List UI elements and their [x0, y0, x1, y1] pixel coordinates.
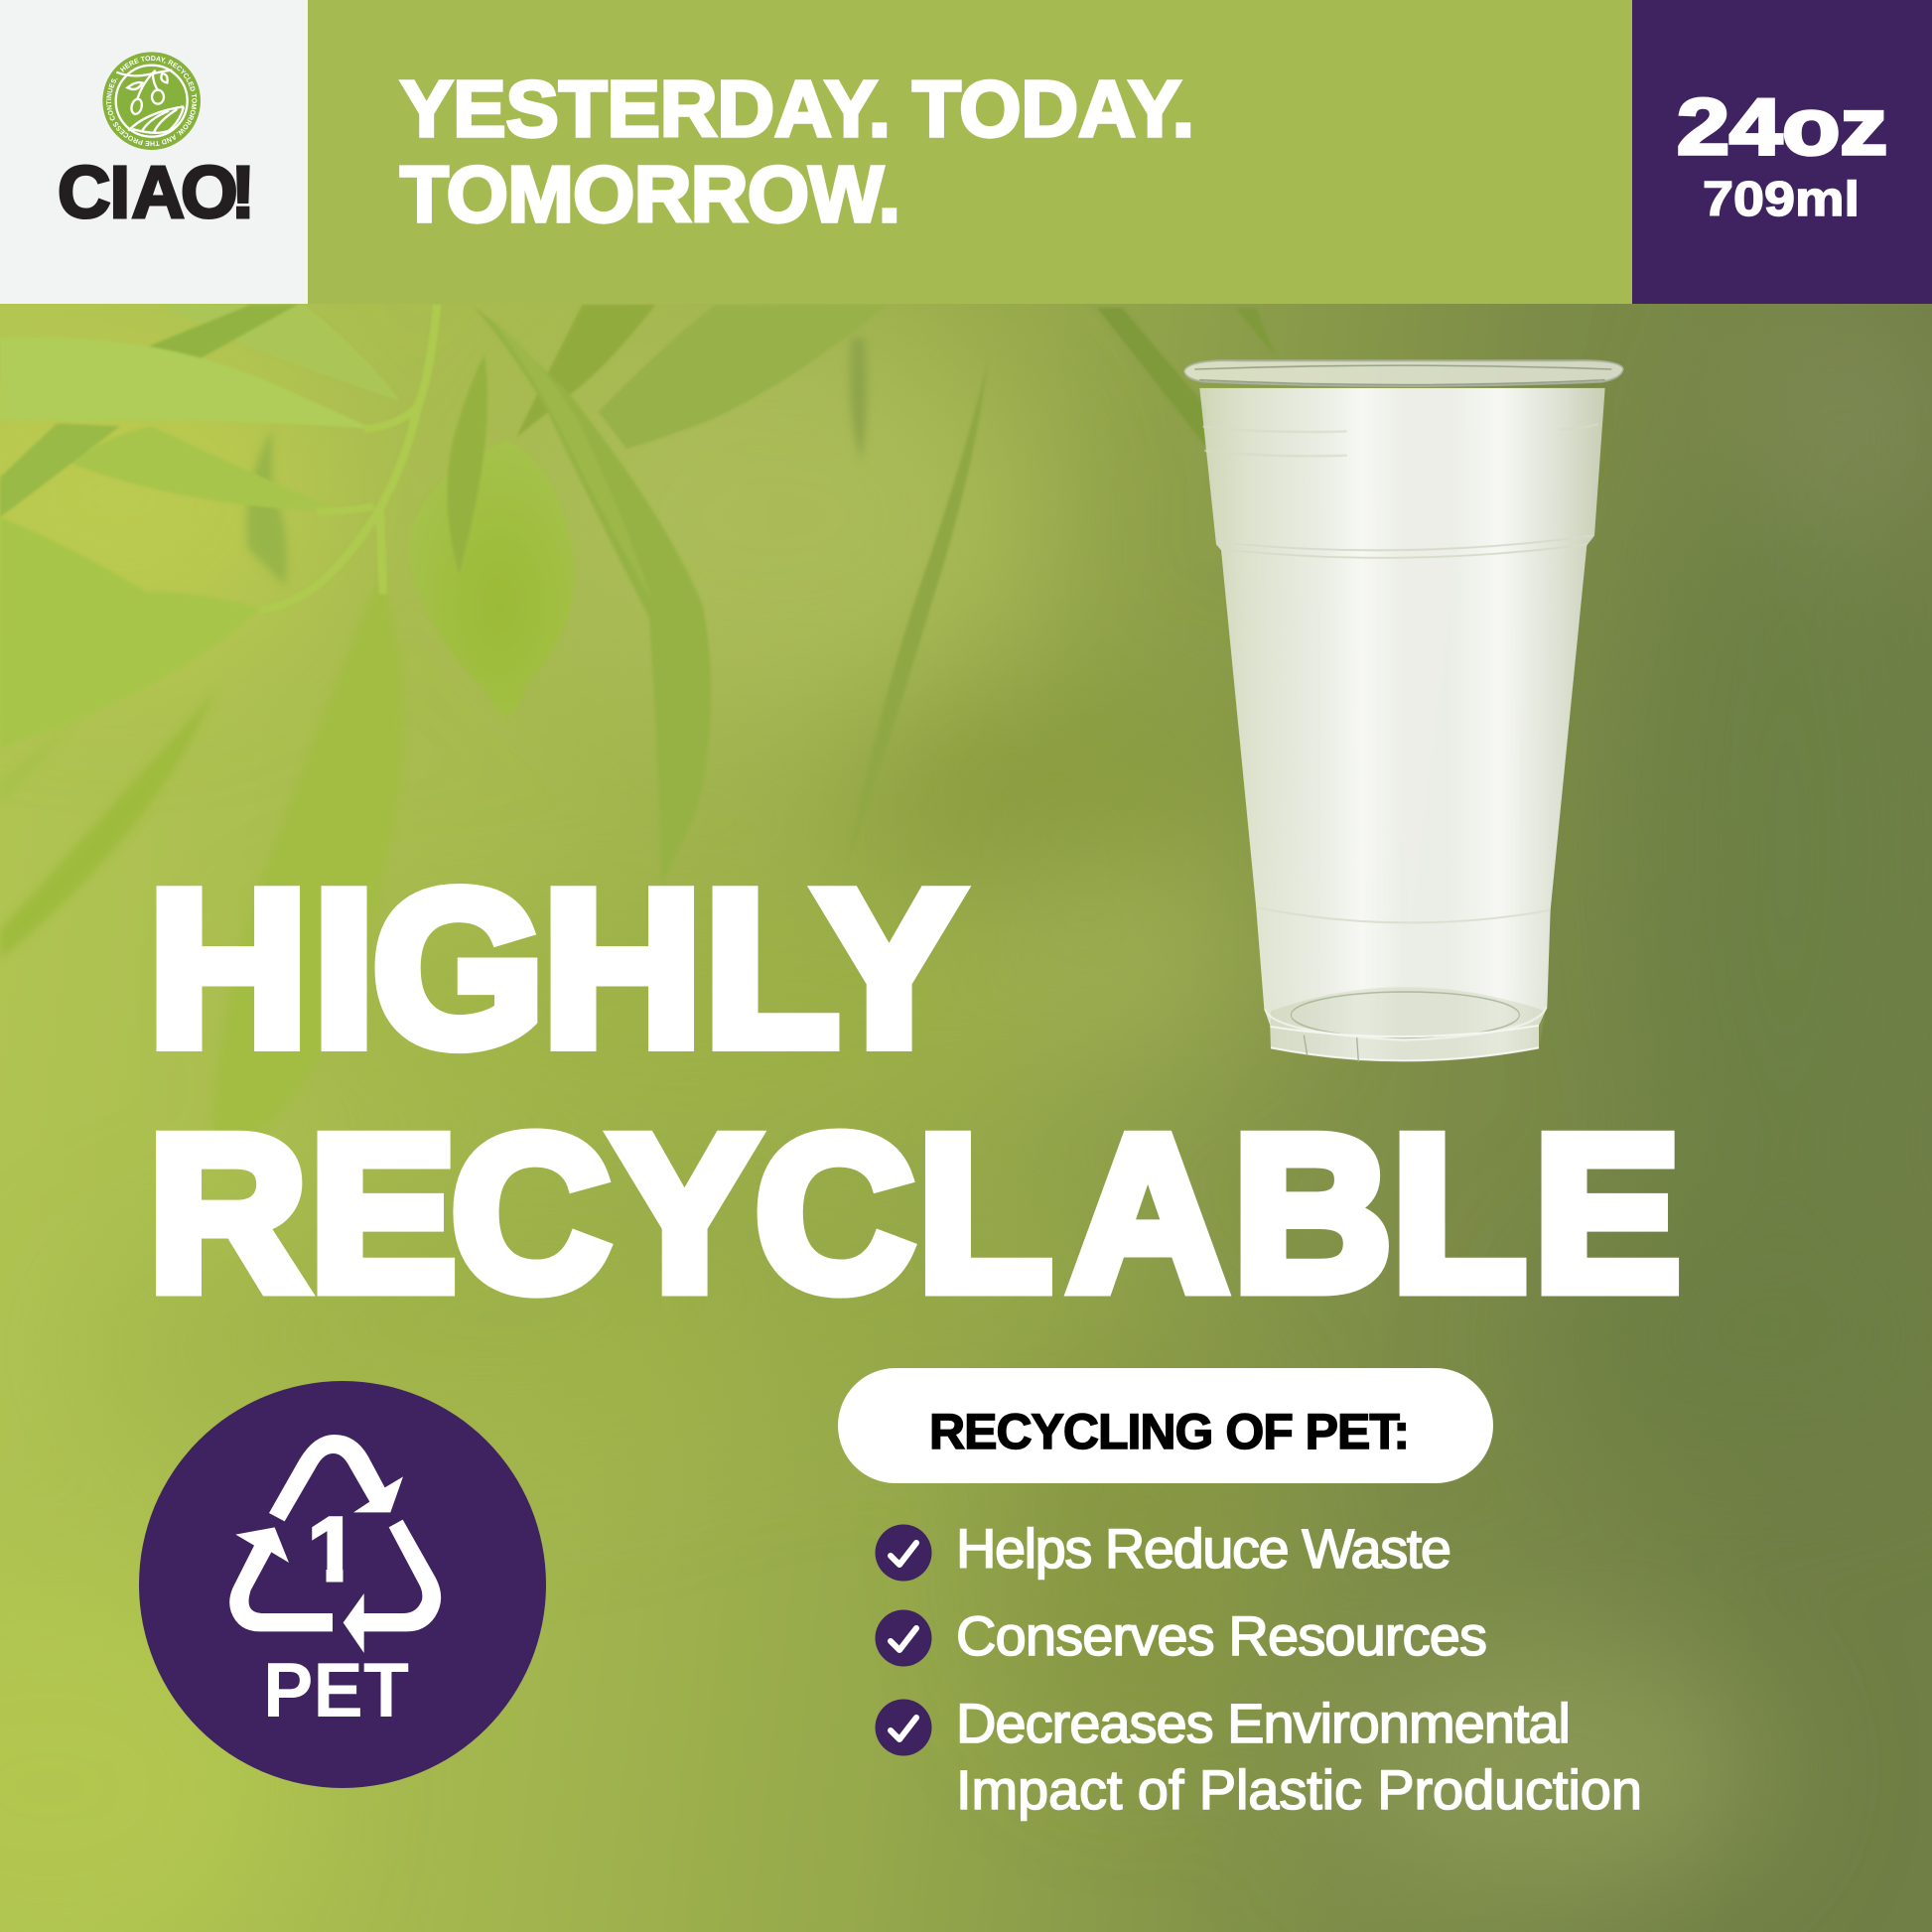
- panel: tagline: [308, 0, 1632, 304]
- benefit: decreases environmental impact: [876, 1692, 1642, 1821]
- headline: [148, 846, 1681, 1336]
- headline: RECYCLABLE: [148, 1090, 1681, 1336]
- benefit: conserves resources: Conserves Resources: [956, 1604, 1487, 1667]
- tagline text: [400, 65, 1194, 238]
- size in millilitres: 709ml: [1703, 173, 1860, 226]
- size in ounces: 24oz: [1677, 82, 1887, 171]
- headline: HIGHLY: [149, 846, 963, 1092]
- panel: recycling of PET benefits: [838, 1368, 1642, 1821]
- icon: round olive logo badge: HERE TODAY, RECYCLED TOMORROW. AND THE PROCESS CONTINUES.: [106, 56, 197, 147]
- benefit: decreases environmental impact: Impact of Plastic Production: [956, 1758, 1642, 1821]
- benefit: helps reduce waste: Helps Reduce Waste: [956, 1517, 1451, 1580]
- product: clear plastic cup: [1184, 360, 1623, 1061]
- badge: PET recycling code 1: [139, 1381, 546, 1788]
- tagline text: YESTERDAY. TODAY.: [400, 65, 1194, 153]
- tagline text: TOMORROW.: [400, 150, 900, 238]
- logo wordmark: CIAO!: [58, 151, 255, 233]
- pill heading: RECYCLING OF PET:: [929, 1404, 1410, 1459]
- pill heading: [838, 1368, 1493, 1483]
- benefit: decreases environmental impact: Decreases Environmental: [956, 1692, 1571, 1754]
- icon: recycling triangle arrows: [229, 1435, 441, 1653]
- panel: size: [1632, 0, 1932, 304]
- panel: logo: [0, 0, 308, 304]
- PET label: PET: [263, 1646, 409, 1733]
- header band: [0, 0, 1932, 304]
- recycling number: 1: [308, 1499, 358, 1600]
